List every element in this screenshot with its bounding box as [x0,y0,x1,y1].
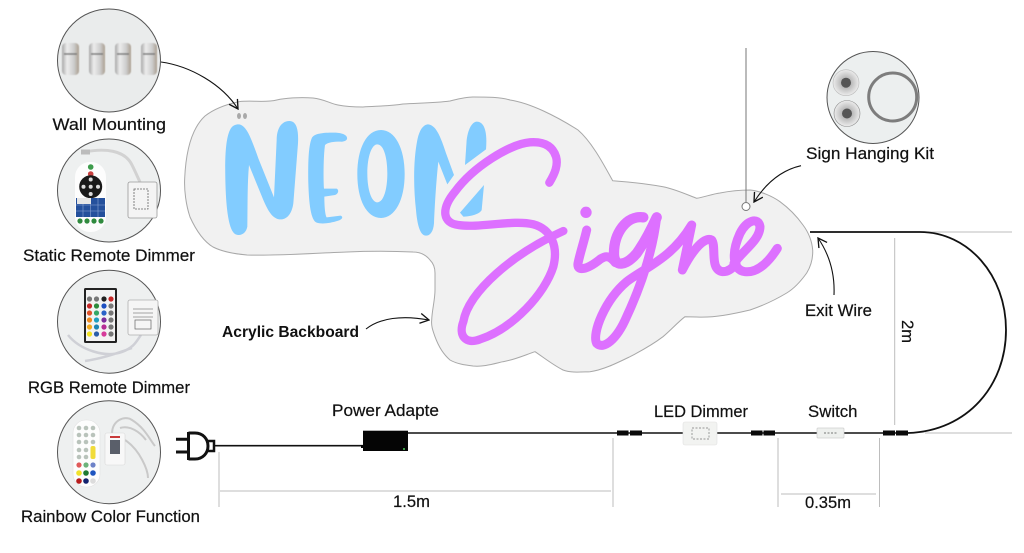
hanging wire and hole [742,48,750,210]
label: rainbow color function: Rainbow Color Function [21,508,200,526]
icon: plug [176,432,214,460]
inline switch [817,428,844,438]
connector: dimmer to switch [751,430,775,436]
dimension guide lines [219,232,1012,507]
photo: rainbow color function remote [58,401,160,504]
acrylic backboard [185,97,813,372]
label: sign hanging kit: Sign Hanging Kit [806,145,934,163]
connector: switch to sign [883,430,908,436]
label: acrylic backboard: Acrylic Backboard [222,324,359,341]
arrow: acrylic backboard [366,318,429,329]
label: 2m: 2m [898,320,916,343]
power adapter [361,431,408,451]
arrow: wall mounting [161,62,238,109]
label: switch: Switch [808,403,858,421]
LED dimmer [683,422,717,445]
neon word: NEON [225,121,486,236]
label: LED dimmer: LED Dimmer [654,403,748,421]
power wire [215,232,1006,446]
label: exit wire: Exit Wire [805,302,872,320]
mounting holes on backboard [237,113,247,119]
arrow: exit wire [818,238,834,295]
photo: wall mounting standoffs [58,9,160,112]
arrow: sign hanging kit [754,166,801,202]
label: 1.5m: 1.5m [393,493,430,511]
photo: sign hanging kit [827,52,919,144]
label: 0.35m: 0.35m [805,494,851,512]
label: wall mounting: Wall Mounting [52,116,166,134]
label: static remote dimmer: Static Remote Dimmer [23,247,196,265]
label: RGB remote dimmer: RGB Remote Dimmer [28,379,190,397]
label: power adapter: Power Adapte [332,402,439,420]
neon word: Signe [445,142,777,345]
photo: RGB remote dimmer [58,270,160,373]
connector: adapter to dimmer [617,430,642,436]
photo: static remote dimmer [58,139,160,242]
